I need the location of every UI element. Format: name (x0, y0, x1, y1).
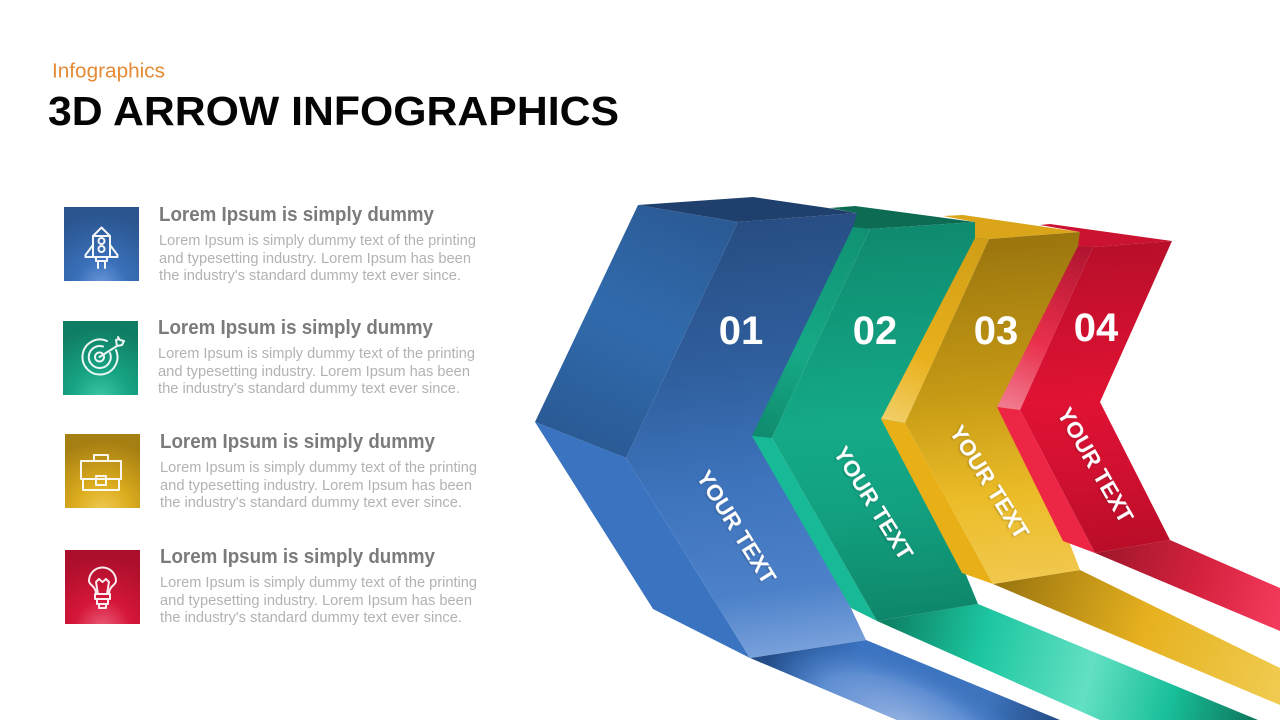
title: 3D ARROW INFOGRAPHICS (48, 88, 619, 134)
item 4 body text: the industry's standard dummy text ever since. (160, 610, 462, 626)
list item 3 (65, 431, 477, 511)
list item 2 (63, 317, 475, 397)
item 2 body text: the industry's standard dummy text ever since. (158, 381, 460, 397)
3D arrow 03 yellow (881, 215, 1280, 705)
item 4 heading: Lorem Ipsum is simply dummy (160, 546, 436, 568)
label YOUR TEXT 2: YOUR TEXT (829, 442, 918, 565)
label YOUR TEXT 1: YOUR TEXT (692, 466, 781, 589)
number 03: 03 (974, 309, 1018, 353)
item 1 body text: and typesetting industry. Lorem Ipsum has been (159, 251, 471, 267)
item 4 body text: and typesetting industry. Lorem Ipsum has been (160, 593, 472, 609)
label YOUR TEXT 3: YOUR TEXT (945, 421, 1034, 544)
item 3 heading: Lorem Ipsum is simply dummy (160, 431, 436, 453)
icon: briefcase (65, 434, 140, 508)
item 1 body text: Lorem Ipsum is simply dummy text of the printing (159, 233, 476, 249)
3D arrow 02 green (752, 206, 1258, 720)
item 2 body text: and typesetting industry. Lorem Ipsum has been (158, 364, 470, 380)
3D arrow 04 red (997, 224, 1280, 631)
eyebrow label: Infographics (52, 60, 165, 82)
number 01: 01 (719, 309, 763, 353)
label YOUR TEXT 4: YOUR TEXT (1052, 403, 1138, 527)
item 2 heading: Lorem Ipsum is simply dummy (158, 317, 434, 339)
item 3 body text: the industry's standard dummy text ever since. (160, 495, 462, 511)
item 3 body text: Lorem Ipsum is simply dummy text of the printing (160, 460, 477, 476)
list item 1 (64, 204, 476, 284)
number 04: 04 (1074, 306, 1119, 350)
item 4 body text: Lorem Ipsum is simply dummy text of the printing (160, 575, 477, 591)
item 1 body text: the industry's standard dummy text ever since. (159, 268, 461, 284)
icon: target (63, 321, 138, 395)
item 2 body text: Lorem Ipsum is simply dummy text of the printing (158, 346, 475, 362)
list item 4 (65, 546, 477, 626)
icon: rocket (64, 207, 139, 281)
number 02: 02 (853, 309, 897, 353)
icon: light bulb (65, 550, 140, 624)
3D arrow 01 blue (535, 197, 1060, 720)
item 1 heading: Lorem Ipsum is simply dummy (159, 204, 435, 226)
item 3 body text: and typesetting industry. Lorem Ipsum has been (160, 478, 472, 494)
